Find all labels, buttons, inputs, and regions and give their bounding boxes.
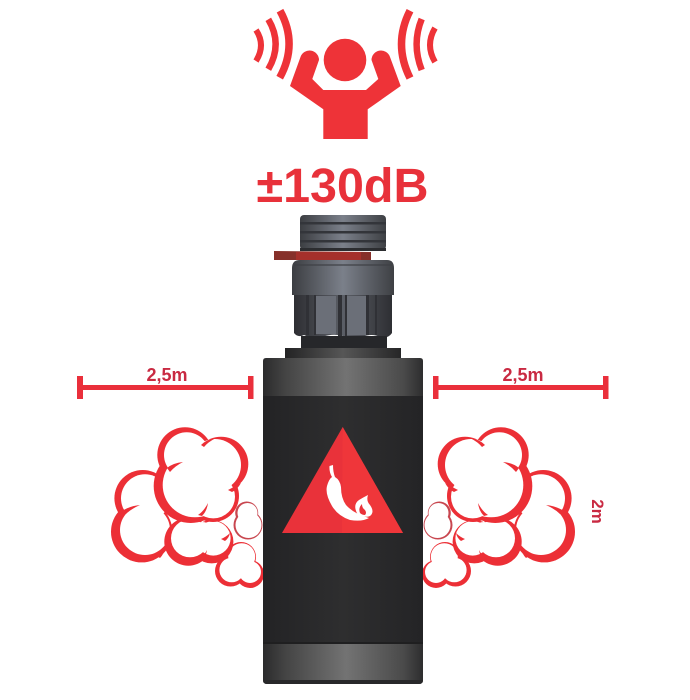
- sound waves left: [256, 11, 289, 78]
- dimension: right 2,5m: 2,5m: [502, 365, 544, 385]
- person figure: [290, 39, 401, 139]
- warning triangle: [282, 427, 403, 533]
- cylinder body: [263, 358, 423, 684]
- left smoke cloud: [111, 427, 264, 588]
- dark neck: [301, 336, 387, 348]
- dimension: left 2,5m: [77, 365, 254, 399]
- icon: flame: [355, 495, 372, 517]
- device: [263, 215, 423, 684]
- icon: chili pepper: [327, 465, 369, 521]
- dimension: left 2,5m: 2,5m: [146, 365, 188, 385]
- grip nut: [292, 260, 394, 338]
- label: 2m height: 2m: [588, 499, 607, 524]
- right smoke cloud: [422, 427, 575, 588]
- icon: person with raised arms and sound waves: [256, 11, 435, 139]
- dimension: right 2,5m: [433, 365, 608, 399]
- base ring: [285, 348, 401, 358]
- heading: decibel level: ±130dB: [256, 160, 428, 213]
- sound waves right: [402, 11, 435, 78]
- red flange: [274, 251, 371, 260]
- threaded top cap: [300, 215, 386, 251]
